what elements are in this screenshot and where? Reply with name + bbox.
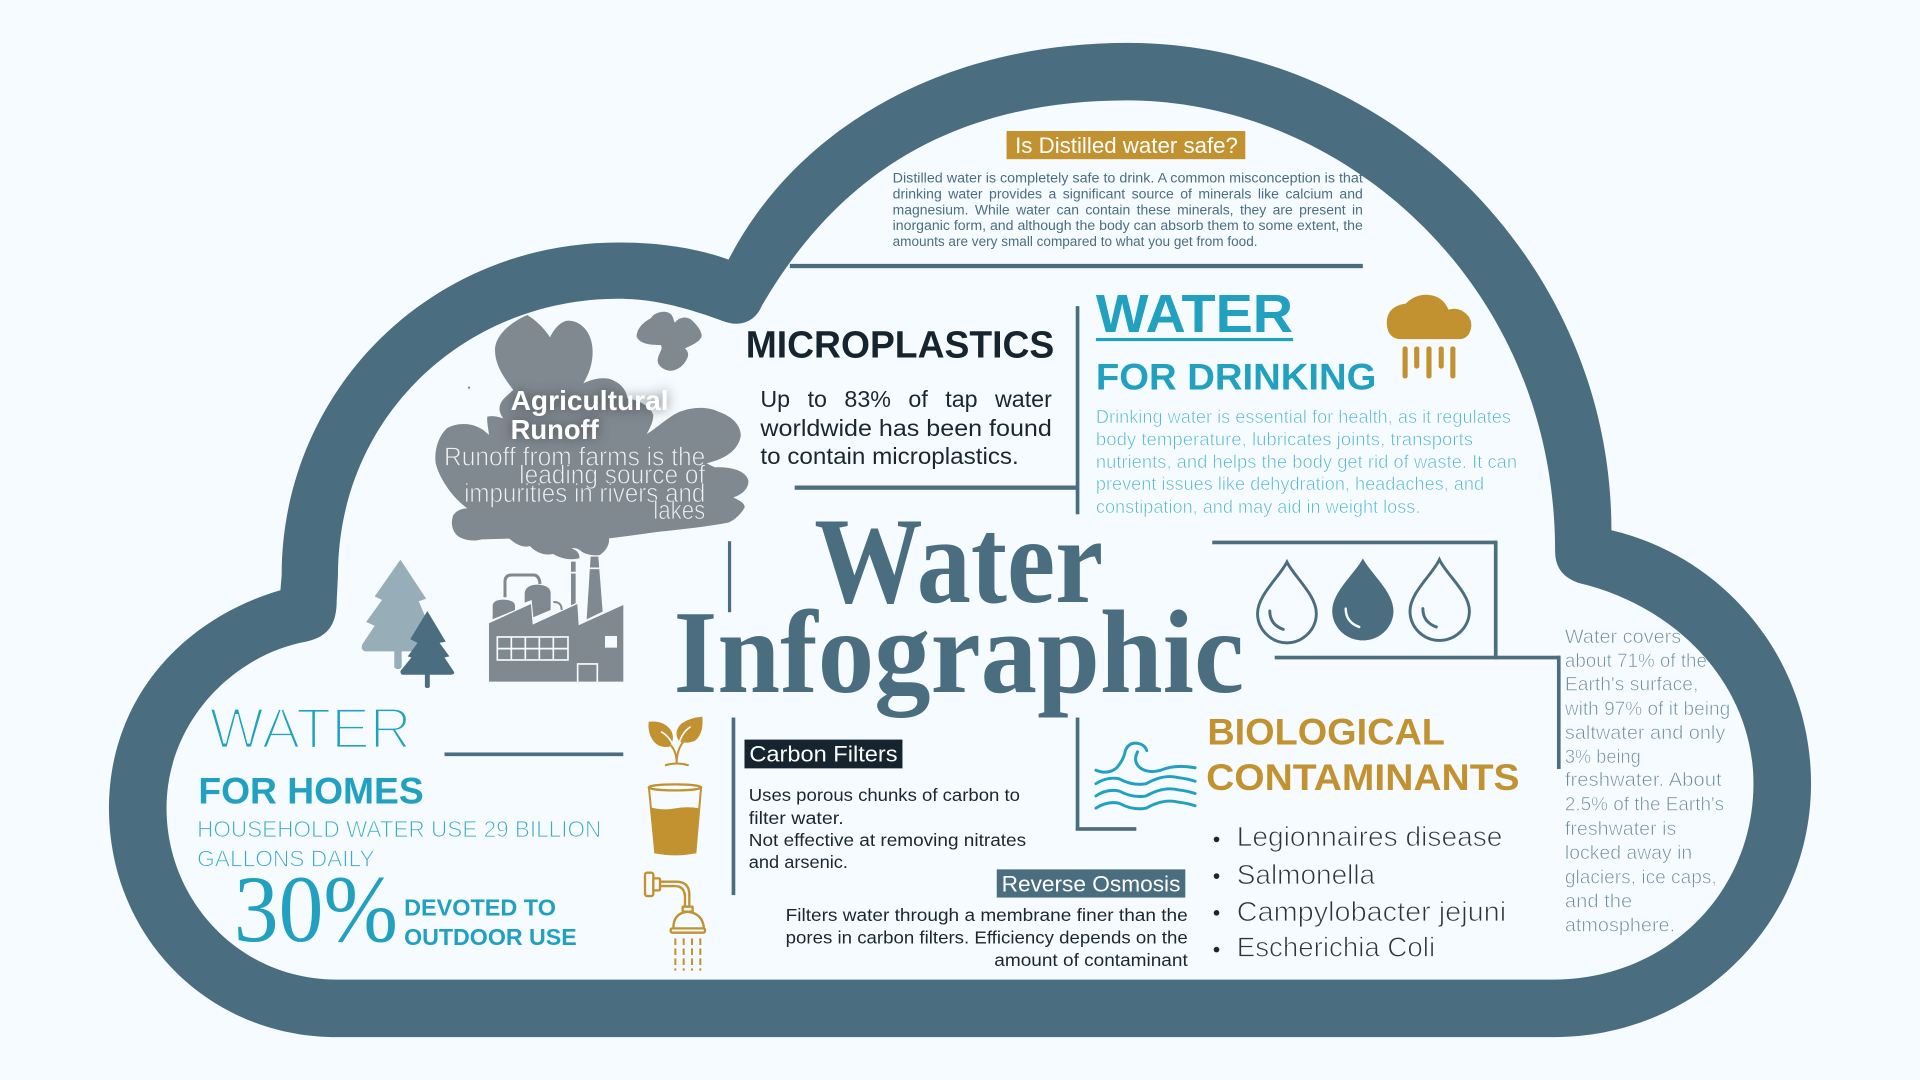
- reverse osmosis text: amount of contaminant: [994, 950, 1188, 970]
- drinking text: nutrients, and helps the body get rid of waste. It can: [1096, 451, 1517, 472]
- icons: sprout, glass, shower: [645, 717, 705, 971]
- outline drop left: [1258, 562, 1316, 643]
- water coverage text: about 71% of the: [1565, 651, 1707, 672]
- section: distilled water: [893, 131, 1363, 249]
- drinking text: prevent issues like dehydration, headaches, and: [1096, 473, 1484, 494]
- microplastics text: [759, 386, 1052, 469]
- household water use text: [197, 816, 601, 871]
- distilled water paragraph: amounts are very small compared to what you get from food.: [893, 234, 1258, 249]
- icon: shower: [645, 873, 705, 971]
- contaminants list: Legionnaires disease: [1237, 821, 1502, 852]
- icon: water drops: [1258, 558, 1469, 643]
- carbon filters text: [749, 785, 1026, 872]
- water coverage text: atmosphere.: [1565, 915, 1675, 936]
- microplastics text: Up to 83% of tap water: [760, 386, 1052, 412]
- reverse osmosis label: Reverse Osmosis: [1002, 871, 1180, 896]
- light tree: [362, 560, 429, 669]
- reverse osmosis text: pores in carbon filters. Efficiency depends on the: [786, 928, 1188, 948]
- water coverage text: Water covers: [1565, 627, 1681, 648]
- water heading: WATER: [1096, 284, 1293, 344]
- distilled water paragraph: [893, 170, 1363, 249]
- water coverage text: 3% being: [1565, 747, 1641, 768]
- for homes subheading: FOR HOMES: [198, 770, 424, 811]
- distilled water paragraph: inorganic form, and although the body can absorb them to some extent, the: [893, 218, 1363, 233]
- main title: Water: [814, 494, 1103, 629]
- household water use text: HOUSEHOLD WATER USE 29 BILLION: [197, 816, 601, 842]
- water coverage text: freshwater. About: [1565, 770, 1722, 791]
- section: microplastics: [746, 325, 1054, 469]
- water coverage text: and the: [1565, 891, 1632, 912]
- carbon filters text: Not effective at removing nitrates: [749, 830, 1026, 850]
- carbon filters text: filter water.: [749, 808, 844, 828]
- contaminants list: Escherichia Coli: [1237, 931, 1435, 962]
- contaminants list: Salmonella: [1237, 859, 1375, 890]
- dark tree: [400, 611, 454, 688]
- drinking text: Drinking water is essential for health, as it regulates: [1096, 406, 1511, 427]
- label: is distilled water safe: Is Distilled water safe?: [1015, 133, 1238, 158]
- carbon filters text: Uses porous chunks of carbon to: [749, 785, 1020, 805]
- water coverage text: glaciers, ice caps,: [1565, 867, 1717, 888]
- agricultural runoff heading: [511, 385, 669, 445]
- section: water for homes: [197, 697, 601, 962]
- filled drop middle: [1332, 558, 1393, 640]
- carbon filters label: Carbon Filters: [749, 742, 898, 767]
- icon: glass of water: [649, 784, 701, 855]
- distilled water paragraph: Distilled water is completely safe to drink. A common misconception is that: [893, 170, 1363, 185]
- outline drop right: [1410, 560, 1469, 640]
- water coverage text: saltwater and only: [1565, 723, 1726, 744]
- water coverage text: freshwater is: [1565, 819, 1676, 840]
- runoff text: Runoff from farms is the: [444, 443, 705, 471]
- devoted to outdoor use: [404, 894, 577, 950]
- runoff text: lakes: [653, 497, 705, 525]
- water heading thin: WATER: [209, 697, 411, 761]
- devoted to outdoor use: DEVOTED TO: [404, 894, 556, 920]
- icon: rain cloud: [1387, 295, 1471, 378]
- main title: [673, 494, 1244, 718]
- for drinking subheading: FOR DRINKING: [1096, 356, 1376, 397]
- reverse osmosis text: [786, 905, 1188, 970]
- runoff text: impurities in rivers and: [464, 480, 705, 508]
- distilled water paragraph: drinking water provides a significant source of minerals like calcium and: [893, 186, 1363, 201]
- biological contaminants heading: CONTAMINANTS: [1206, 757, 1520, 798]
- runoff text: leading source of: [519, 462, 706, 490]
- contaminants list: [1214, 821, 1506, 962]
- reverse osmosis: [786, 869, 1188, 970]
- agricultural runoff heading: Runoff: [511, 414, 599, 445]
- drinking text: body temperature, lubricates joints, transports: [1096, 429, 1473, 450]
- icon: sprout: [648, 717, 703, 765]
- 30 percent stat: 30%: [234, 856, 398, 962]
- main title: Infographic: [673, 586, 1244, 718]
- reverse osmosis text: Filters water through a membrane finer than the: [786, 905, 1188, 925]
- drinking text: [1096, 406, 1517, 517]
- icon: waves: [1096, 743, 1195, 809]
- biological contaminants heading: BIOLOGICAL: [1207, 711, 1445, 752]
- water coverage text: with 97% of it being: [1564, 699, 1730, 720]
- water coverage text: Earth's surface,: [1565, 675, 1698, 696]
- microplastics text: to contain microplastics.: [760, 443, 1019, 469]
- devoted to outdoor use: OUTDOOR USE: [404, 924, 577, 950]
- section: biological contaminants: [1096, 711, 1520, 962]
- microplastics heading: MICROPLASTICS: [746, 325, 1054, 367]
- contaminants list: Campylobacter jejuni: [1237, 896, 1506, 927]
- distilled water paragraph: magnesium. While water can contain these minerals, they are present in: [893, 202, 1363, 217]
- icon: pine trees: [362, 560, 454, 688]
- section: agricultural runoff smoke: [435, 312, 748, 559]
- agricultural runoff heading: Agricultural: [511, 385, 669, 416]
- smoke cloud: [435, 312, 748, 559]
- runoff text: [444, 443, 706, 525]
- household water use text: GALLONS DAILY: [197, 845, 375, 871]
- section: water for drinking: [1096, 284, 1517, 517]
- icon: factory: [489, 557, 623, 684]
- carbon filters: [744, 740, 1026, 872]
- drinking text: constipation, and may aid in weight loss.: [1096, 496, 1420, 517]
- carbon filters text: and arsenic.: [749, 852, 848, 872]
- water coverage text: [1564, 627, 1730, 936]
- water coverage text: locked away in: [1565, 843, 1692, 864]
- microplastics text: worldwide has been found: [759, 415, 1052, 441]
- water coverage text: 2.5% of the Earth's: [1565, 795, 1724, 816]
- biological contaminants heading: [1206, 711, 1520, 798]
